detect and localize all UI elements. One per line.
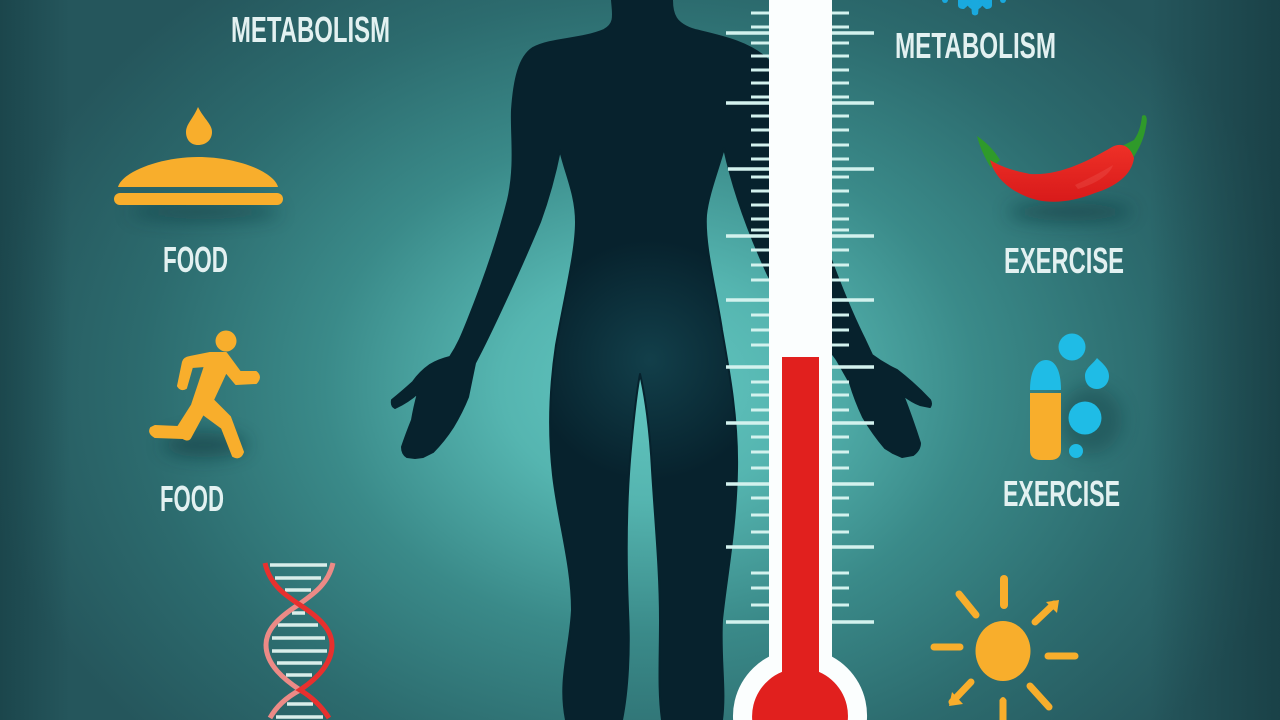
label: metabolism left: METABOLISM bbox=[231, 9, 390, 50]
label: exercise second: EXERCISE bbox=[1003, 473, 1120, 514]
icon: snowflake bbox=[942, 0, 1006, 16]
label: exercise: EXERCISE bbox=[1004, 240, 1124, 281]
label: food second: FOOD bbox=[160, 478, 224, 519]
icon: runner bbox=[150, 330, 259, 457]
label: food: FOOD bbox=[163, 239, 228, 280]
thermometer glass bbox=[733, 0, 867, 720]
body silhouette bbox=[392, 0, 931, 720]
icon: sun bbox=[934, 579, 1075, 720]
icon: DNA helix bbox=[265, 563, 333, 718]
thermometer bbox=[733, 0, 867, 720]
label: metabolism right: METABOLISM bbox=[895, 25, 1056, 66]
icon: chili pepper bbox=[977, 115, 1147, 221]
thermometer scale ticks bbox=[726, 13, 874, 622]
icon: food dish with drop bbox=[114, 107, 283, 220]
icon: capsule and droplets bbox=[1030, 334, 1122, 460]
thermometer mercury bbox=[752, 357, 848, 720]
